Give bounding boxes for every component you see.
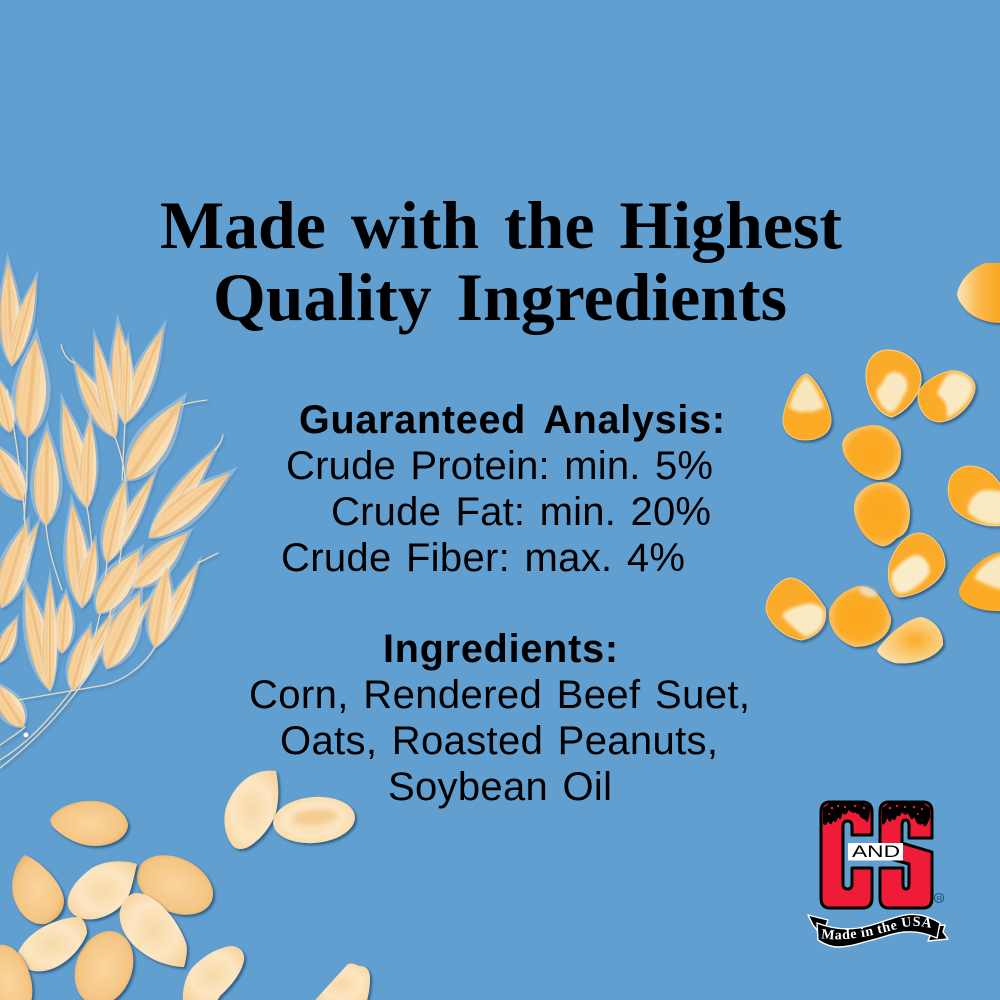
registered mark: R bbox=[937, 894, 943, 903]
peanut half bbox=[17, 917, 87, 971]
oat grains bbox=[0, 251, 248, 736]
logo letter S bbox=[880, 802, 932, 908]
ingredients list: Corn, Rendered Beef Suet, bbox=[249, 673, 750, 717]
peanut bbox=[50, 801, 128, 846]
illustration: peanuts bbox=[0, 771, 370, 1000]
kernel bbox=[959, 552, 1000, 611]
kernel bbox=[948, 466, 1000, 526]
peanut half bbox=[120, 893, 187, 967]
logo AND box: AND bbox=[852, 842, 900, 861]
stem highlight bbox=[24, 732, 28, 738]
logo: C and S, made in the USA bbox=[807, 800, 949, 948]
logo ribbon: Made in the USA bbox=[821, 916, 931, 940]
kernel bbox=[766, 578, 826, 640]
peanut half bbox=[271, 794, 357, 846]
kernel bbox=[866, 350, 921, 417]
crude protein: Crude Protein: min. 5% bbox=[286, 444, 713, 488]
kernel bbox=[957, 263, 1000, 323]
peanut half bbox=[183, 946, 244, 1000]
registered mark bbox=[934, 893, 944, 903]
kernel bbox=[888, 533, 945, 597]
kernel bbox=[877, 617, 943, 663]
oat stems bbox=[0, 345, 223, 768]
title: Quality Ingredients bbox=[213, 259, 787, 335]
ingredients list bbox=[249, 673, 750, 809]
kernel bbox=[783, 374, 831, 440]
peanut bbox=[65, 923, 143, 1000]
kernel bbox=[829, 585, 891, 647]
peanut bbox=[0, 939, 40, 1000]
kernel bbox=[918, 371, 975, 422]
guaranteed analysis text block bbox=[281, 398, 725, 580]
heading: ingredients: Ingredients: bbox=[383, 627, 618, 671]
kernel bbox=[854, 482, 910, 546]
crude fiber: Crude Fiber: max. 4% bbox=[281, 536, 685, 580]
logo AND box bbox=[848, 842, 903, 861]
peanut half bbox=[312, 963, 370, 1000]
title bbox=[160, 187, 842, 335]
heading: guaranteed analysis: Guaranteed Analysis: bbox=[299, 398, 725, 442]
ingredients text block bbox=[249, 627, 750, 809]
title: Made with the Highest bbox=[160, 187, 842, 263]
peanut bbox=[12, 855, 64, 924]
logo ribbon bbox=[807, 914, 949, 948]
illustration: oat sprig bbox=[0, 251, 248, 768]
crude fat: Crude Fat: min. 20% bbox=[331, 490, 711, 534]
ingredients list: Oats, Roasted Peanuts, bbox=[280, 719, 718, 763]
kernel bbox=[842, 425, 901, 480]
peanut half bbox=[68, 861, 137, 919]
peanut half bbox=[224, 771, 278, 849]
illustration: corn kernels bbox=[766, 263, 1000, 663]
peanut bbox=[127, 844, 223, 926]
logo letter C bbox=[821, 802, 872, 908]
ingredients list: Soybean Oil bbox=[388, 765, 612, 809]
